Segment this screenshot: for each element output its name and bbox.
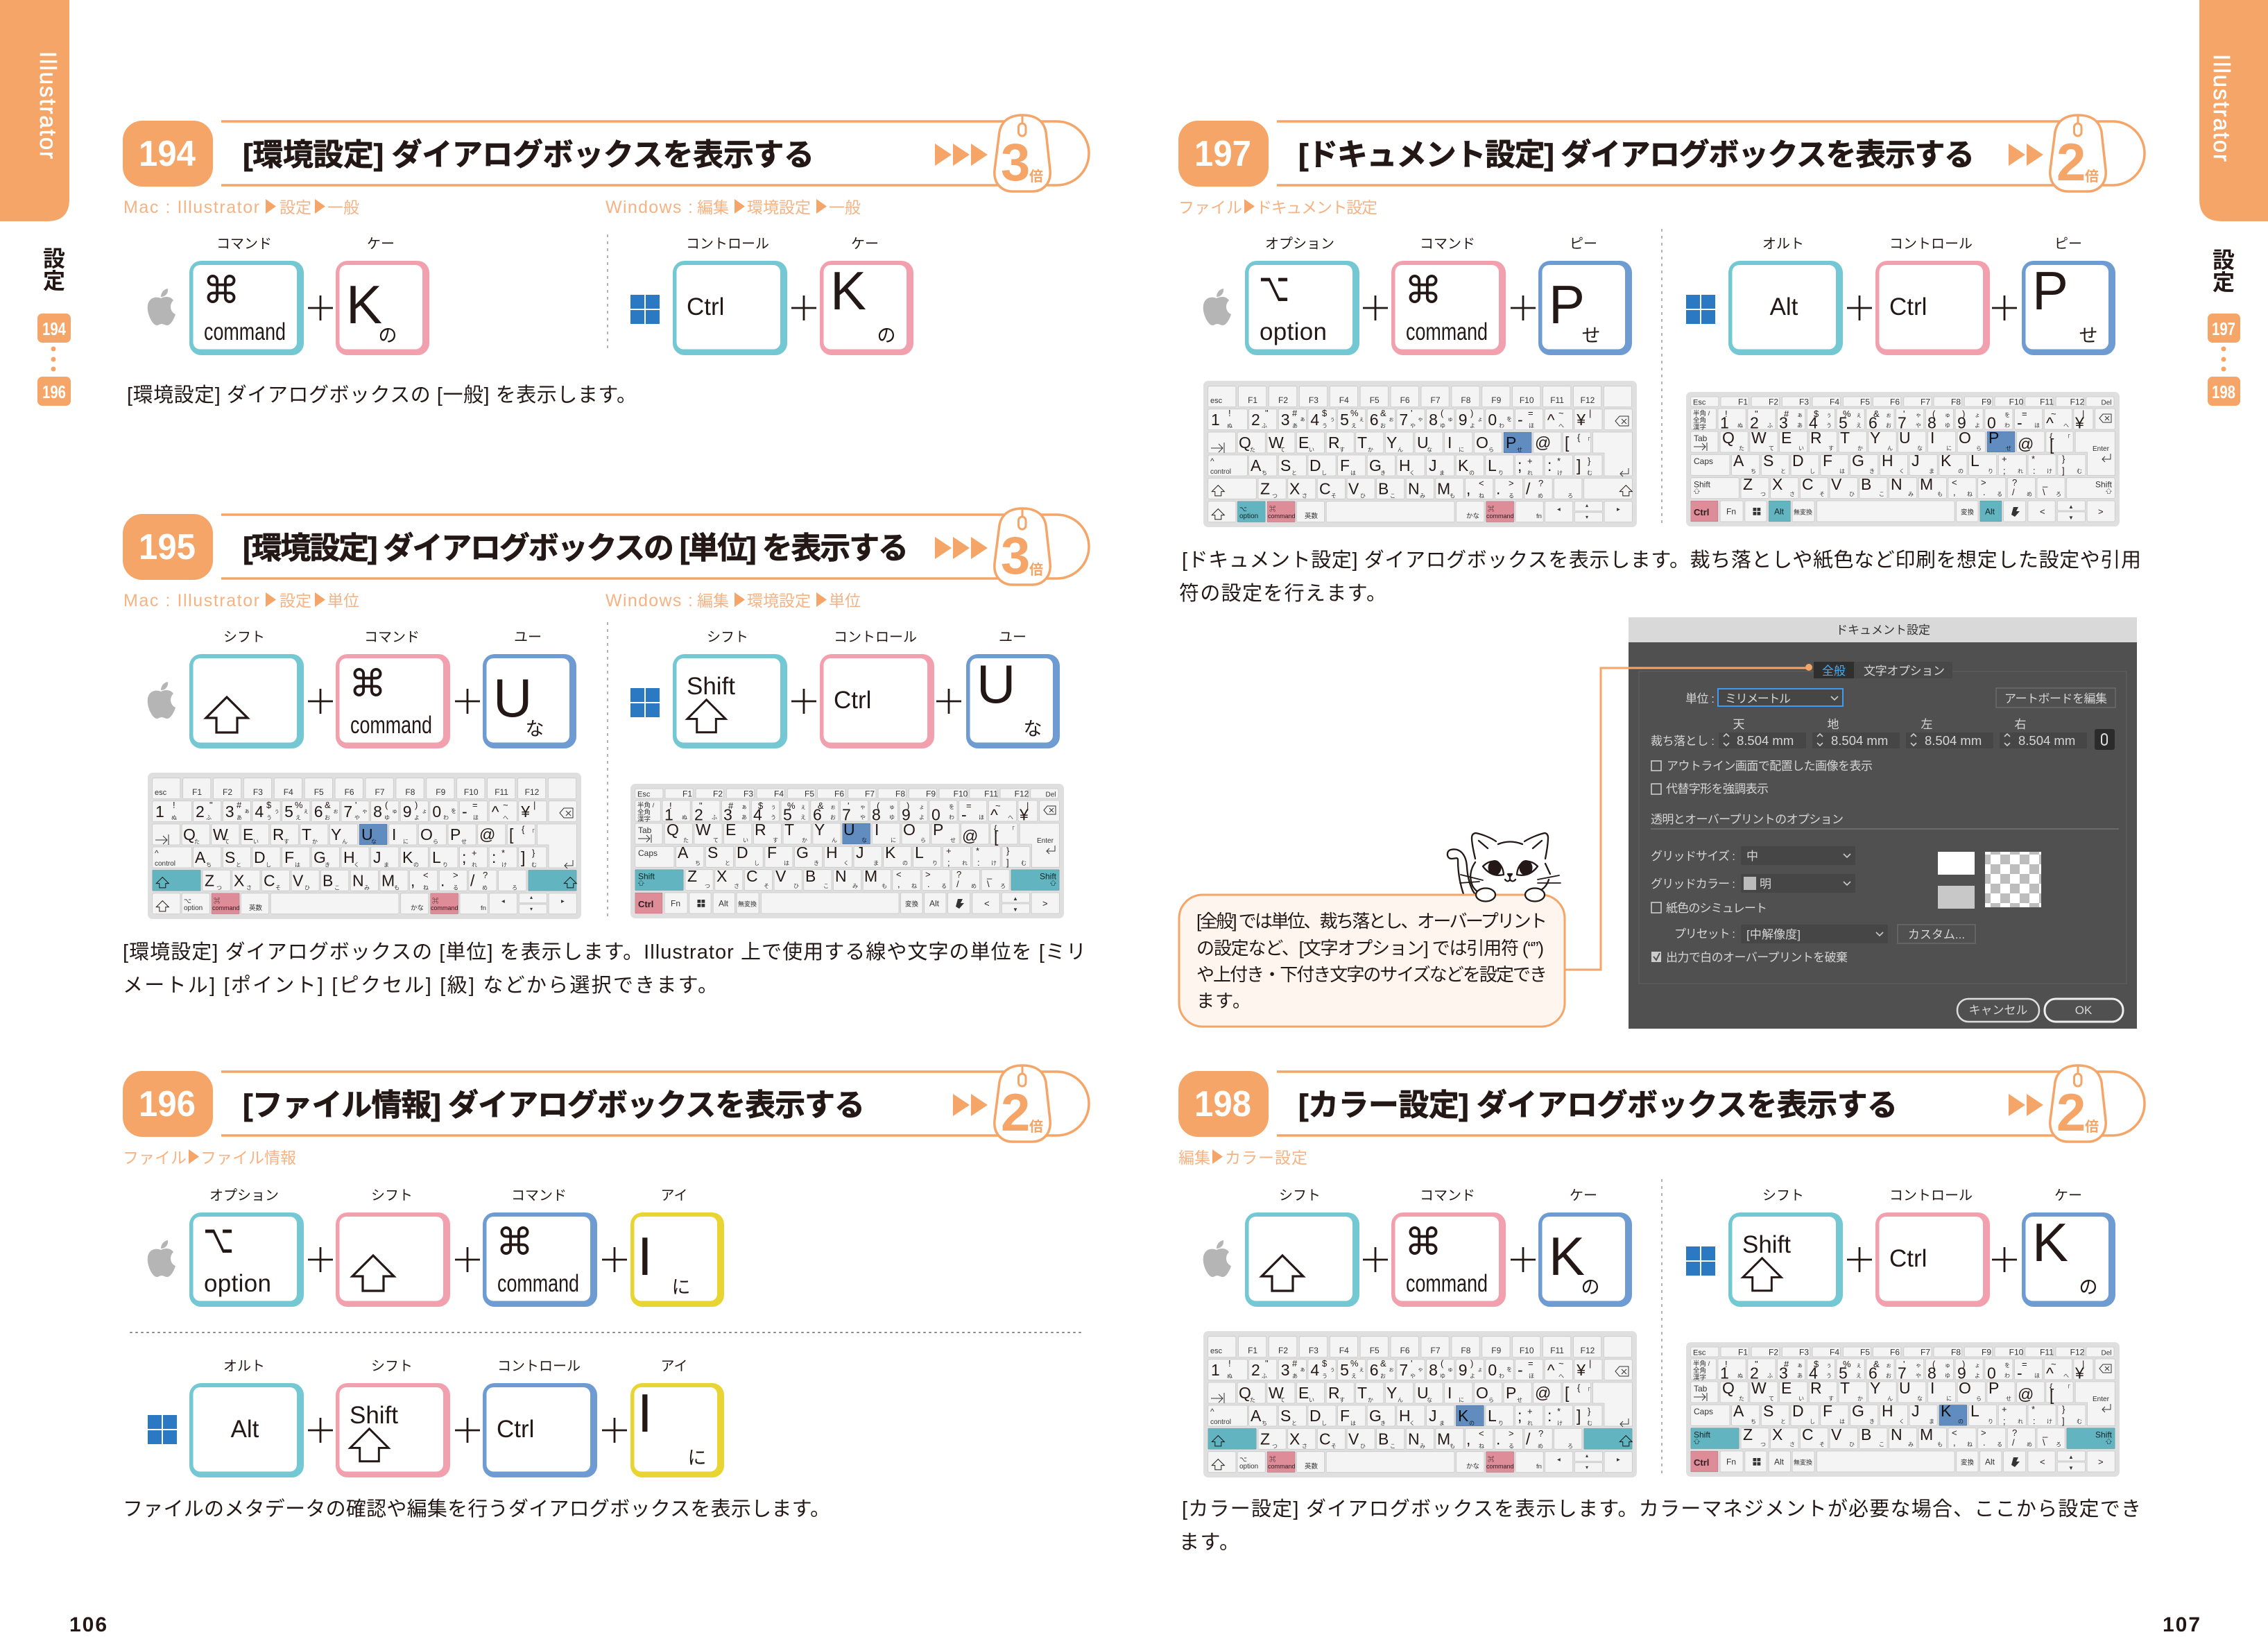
right side heading: 設定 xyxy=(2213,248,2235,295)
key: option: option xyxy=(1260,318,1327,345)
key: I windows: に xyxy=(688,1448,706,1468)
menu path windows: 単位 xyxy=(829,592,861,610)
key: Alt: Alt xyxy=(1770,293,1798,320)
heading 194 xyxy=(123,121,1089,187)
heading 198: [カラー設定] ダイアログボックスを表示する xyxy=(1298,1088,1898,1122)
key: U windows xyxy=(966,630,1060,748)
key: command xyxy=(1391,1188,1506,1307)
key: shift: シフト xyxy=(1279,1188,1321,1203)
plus xyxy=(1847,1247,1872,1272)
screenshot: document settings dialog: ミリメートル xyxy=(1725,692,1791,705)
left side range chips 194-196 xyxy=(37,314,71,406)
screenshot: document settings dialog: 中 xyxy=(1746,850,1758,863)
key: K windows: の xyxy=(2079,1277,2097,1298)
key: Ctrl: コントロール xyxy=(1889,1188,1973,1203)
speed badge 2x xyxy=(2009,1065,2106,1142)
key: P mac: せ xyxy=(1581,325,1601,346)
screenshot: document settings dialog: 紙色のシミュレート xyxy=(1666,902,1767,915)
screenshot: document settings dialog: 明 xyxy=(1760,877,1771,891)
left side tab: Illustrator xyxy=(35,51,61,159)
menu path mac: Mac : Illustrator xyxy=(123,198,259,217)
illustration: cat xyxy=(1447,833,1561,894)
key: P windows: P xyxy=(2032,260,2068,321)
key: option: option xyxy=(204,1270,271,1297)
plus xyxy=(308,295,333,320)
divider xyxy=(607,622,608,919)
page number 106: 106 xyxy=(69,1613,107,1636)
screenshot: document settings dialog xyxy=(1629,617,2137,1029)
callout: tab explanation: や上付き・下付き文字のサイズなどを設定でき xyxy=(1196,964,1547,985)
divider xyxy=(607,234,608,350)
speed badge 2x: 2 xyxy=(2056,1083,2086,1142)
key: Ctrl: コントロール xyxy=(686,237,769,252)
menu path windows xyxy=(605,198,861,217)
plus xyxy=(1363,295,1388,320)
key: U mac: ユー xyxy=(514,630,542,645)
key: K mac: K xyxy=(1549,1226,1585,1287)
description 195: メートル] [ポイント] [ピクセル] [級] などから選択できます。 xyxy=(123,974,718,997)
screenshot: document settings dialog: ドキュメント設定 xyxy=(1836,624,1930,637)
speed badge 3x xyxy=(935,508,1050,585)
left side range chips 194-196: 196 xyxy=(42,382,66,402)
screenshot: document settings dialog: 右 xyxy=(2014,718,2027,731)
key: U mac xyxy=(483,630,576,748)
description 197: 符の設定を行えます。 xyxy=(1179,582,1386,605)
screenshot: document settings dialog: 8.504 mm xyxy=(2018,733,2075,748)
icon: apple xyxy=(1203,1240,1231,1277)
key: Shift: Shift xyxy=(350,1402,398,1429)
plus xyxy=(308,1418,333,1443)
screenshot: document settings dialog: 単位 : xyxy=(1685,692,1715,705)
key: option xyxy=(1245,237,1359,355)
key: command: ⌘ xyxy=(1404,1220,1442,1264)
icon: windows xyxy=(630,295,660,324)
key: Ctrl: コントロール xyxy=(1889,237,1973,252)
key: option: オプション xyxy=(1265,237,1334,252)
plus xyxy=(602,1418,627,1443)
right side range chips 197-198: 198 xyxy=(2212,382,2235,402)
key: Ctrl: コントロール xyxy=(497,1359,581,1374)
menu path: ドキュメント設定 xyxy=(1256,198,1377,216)
left side heading: 設定: 設 xyxy=(43,246,65,271)
key: Shift: シフト xyxy=(707,630,748,645)
key: I windows: I xyxy=(637,1382,653,1443)
speed badge 3x: 3 xyxy=(1001,133,1030,192)
speed badge 3x: 3 xyxy=(1001,526,1030,585)
key: P windows: ピー xyxy=(2054,237,2082,252)
key: Alt xyxy=(1728,237,1843,355)
divider xyxy=(1661,229,1663,526)
key: K mac: ケー xyxy=(367,237,395,252)
key: K mac xyxy=(1538,1188,1632,1307)
key: P mac xyxy=(1538,237,1632,355)
key: K windows: ケー xyxy=(851,237,879,252)
divider xyxy=(1661,1179,1663,1477)
key: command: コマンド xyxy=(216,237,272,252)
heading 195 xyxy=(123,514,1089,580)
key: K windows: ケー xyxy=(2054,1188,2082,1203)
key: Shift: Shift xyxy=(687,673,735,700)
speed badge 2x: 倍 xyxy=(2085,1119,2099,1135)
heading 196: 196 xyxy=(139,1084,196,1124)
illustration: cat paws xyxy=(1476,888,1545,902)
right side heading: 設定: 設 xyxy=(2213,248,2235,273)
key: U mac: U xyxy=(493,667,532,728)
plus xyxy=(455,689,480,714)
key: option: ⌥ xyxy=(1259,264,1289,311)
key: command: ⌘ xyxy=(1404,268,1442,312)
left side tab xyxy=(0,0,69,221)
key: Alt: オルト xyxy=(223,1359,265,1374)
key: command: command xyxy=(497,1270,579,1297)
page number 107: 107 xyxy=(2163,1613,2200,1636)
key: I mac: に xyxy=(671,1277,691,1298)
menu path xyxy=(1178,1149,1307,1167)
speed badge 2x xyxy=(2009,115,2106,192)
icon: apple xyxy=(148,1240,175,1277)
menu path: 編集 xyxy=(1178,1149,1210,1167)
plus xyxy=(1511,1247,1536,1272)
key: command: コマンド xyxy=(364,630,420,645)
key: U windows: な xyxy=(1024,719,1042,739)
left side heading: 設定 xyxy=(43,246,65,293)
key: Shift: シフト xyxy=(1762,1188,1804,1203)
speed badge 2x: 2 xyxy=(2056,133,2086,192)
icon: apple xyxy=(148,682,175,719)
key: U windows: U xyxy=(977,653,1015,714)
screenshot: document settings dialog: グリッドカラー : xyxy=(1651,877,1735,891)
key: command: コマンド xyxy=(1420,237,1475,252)
key: command: ⌘ xyxy=(496,1220,533,1264)
key: shift: シフト xyxy=(223,630,265,645)
key: K mac: ケー xyxy=(1570,1188,1597,1203)
key: Shift xyxy=(673,630,787,748)
screenshot: document settings dialog: 8.504 mm xyxy=(1737,733,1794,748)
key: K mac: K xyxy=(346,274,382,335)
key: Ctrl: Ctrl xyxy=(1889,293,1927,320)
description 198: ます。 xyxy=(1179,1532,1239,1554)
icon: windows xyxy=(1686,295,1715,324)
plus xyxy=(1992,1247,2017,1272)
key: Ctrl: Ctrl xyxy=(834,687,871,714)
key: I windows xyxy=(630,1359,724,1477)
key: Alt: Alt xyxy=(231,1416,259,1443)
panel: section 194 xyxy=(123,115,1089,406)
key: option: オプション xyxy=(209,1188,279,1203)
right side range chips 197-198: 197 xyxy=(2212,318,2235,339)
speed badge 2x: 倍 xyxy=(1029,1119,1043,1135)
screenshot: document settings dialog: 8.504 mm xyxy=(1925,733,1982,748)
key: Ctrl xyxy=(673,237,787,355)
key: P windows xyxy=(2022,237,2115,355)
heading 197 xyxy=(1178,121,2145,187)
menu path: ファイル xyxy=(123,1149,187,1167)
menu path windows: 編集 xyxy=(697,198,729,216)
key: command xyxy=(1391,237,1506,355)
key: command: ⌘ xyxy=(349,662,386,705)
plus xyxy=(602,1247,627,1272)
menu path xyxy=(1178,198,1377,216)
plus xyxy=(1511,295,1536,320)
left side heading: 設定: 定 xyxy=(43,268,65,293)
right side heading: 設定: 定 xyxy=(2213,270,2235,295)
menu path mac: Mac : Illustrator xyxy=(123,591,259,610)
key: Ctrl xyxy=(1875,1188,1990,1307)
key: Ctrl xyxy=(1875,237,1990,355)
key: command: ⌘ xyxy=(203,268,240,312)
menu path windows xyxy=(605,591,861,610)
screenshot: document settings dialog: 地 xyxy=(1827,718,1839,731)
speed badge 2x: 倍 xyxy=(2085,169,2099,185)
description 197: [ドキュメント設定] ダイアログボックスを表示します。裁ち落としや紙色など印刷を想定した設定や引用 xyxy=(1182,549,2141,572)
keyboard mac xyxy=(1203,381,1637,527)
key: K windows xyxy=(2022,1188,2115,1307)
screenshot: document settings dialog: キャンセル xyxy=(1968,1004,2028,1017)
screenshot: document settings dialog: プリセット : xyxy=(1674,927,1735,941)
menu path mac: 設定 xyxy=(280,592,311,610)
key: I windows: アイ xyxy=(660,1359,688,1374)
callout: tab explanation: ます。 xyxy=(1196,991,1251,1011)
plus xyxy=(1363,1247,1388,1272)
panel: section 196 xyxy=(123,1065,1089,1520)
key: K windows: K xyxy=(2032,1212,2068,1273)
callout: tab explanation: [全般] では単位、裁ち落とし、オーバープリント xyxy=(1196,911,1547,932)
screenshot: document settings dialog: 裁ち落とし : xyxy=(1651,735,1715,748)
right side range chips 197-198 xyxy=(2208,314,2240,406)
description 195: [環境設定] ダイアログボックスの [単位] を表示します。Illustrator 上で使用する線や文字の単位を [ミリ xyxy=(123,941,1086,963)
menu path windows: 環境設定 xyxy=(747,198,811,216)
key: Ctrl: Ctrl xyxy=(1889,1245,1927,1272)
screenshot: document settings dialog: カスタム... xyxy=(1908,928,1965,941)
speed badge 2x: 2 xyxy=(1001,1083,1030,1142)
screenshot: document settings dialog: 透明とオーバープリントのオプション xyxy=(1651,813,1844,826)
key: K mac xyxy=(336,237,429,355)
menu path mac: 設定 xyxy=(280,198,311,216)
key: option xyxy=(189,1188,304,1307)
key: I mac: アイ xyxy=(660,1188,688,1203)
key: shift xyxy=(336,1188,450,1307)
keyboard windows xyxy=(630,784,1064,918)
panel: section 197 xyxy=(1178,115,2145,1029)
heading 194: [環境設定] ダイアログボックスを表示する xyxy=(243,138,814,172)
key: U mac: な xyxy=(526,719,544,739)
speed badge 3x xyxy=(935,115,1050,192)
key: shift xyxy=(1245,1188,1359,1307)
icon: windows xyxy=(630,688,660,717)
key: P mac: ピー xyxy=(1570,237,1597,252)
plus xyxy=(1847,295,1872,320)
icon: windows xyxy=(148,1415,177,1444)
key: P windows: せ xyxy=(2079,325,2097,346)
key: Ctrl xyxy=(483,1359,597,1477)
menu path windows: 一般 xyxy=(829,198,861,216)
key: K mac: の xyxy=(1581,1277,1599,1298)
key: K windows: K xyxy=(830,260,866,321)
description 198 xyxy=(1179,1498,2141,1554)
heading 195: [環境設定] ダイアログボックスの [単位] を表示する xyxy=(243,531,909,565)
plus xyxy=(308,689,333,714)
callout: tab explanation: の設定など、[文字オプション] では引用符 (“”) xyxy=(1196,938,1544,959)
menu path mac xyxy=(123,591,359,610)
key: U windows: ユー xyxy=(999,630,1026,645)
key: Shift: シフト xyxy=(371,1359,413,1374)
icon: windows xyxy=(1686,1246,1715,1276)
description 197 xyxy=(1179,549,2141,605)
screenshot: document settings dialog: アウトライン画面で配置した画像を表示 xyxy=(1667,760,1873,773)
panel: section 198 xyxy=(1178,1065,2145,1554)
key: command: コマンド xyxy=(1420,1188,1475,1203)
menu path xyxy=(123,1149,296,1167)
key: P mac: P xyxy=(1549,274,1585,335)
callout: tab explanation xyxy=(1179,664,1812,1027)
key: command: command xyxy=(204,318,286,345)
plus xyxy=(455,1247,480,1272)
description 198: [カラー設定] ダイアログボックスを表示します。カラーマネジメントが必要な場合、ここから設定でき xyxy=(1182,1498,2141,1520)
key: command: コマンド xyxy=(511,1188,567,1203)
icon: apple xyxy=(1203,289,1231,325)
key: Ctrl: コントロール xyxy=(834,630,917,645)
right side tab: Illustrator xyxy=(2209,54,2235,162)
right side tab xyxy=(2199,0,2268,221)
heading 194: 194 xyxy=(139,134,196,174)
key: Ctrl xyxy=(820,630,934,748)
key: K mac: の xyxy=(379,325,397,346)
menu path windows: Windows : xyxy=(605,591,693,610)
key: I mac xyxy=(630,1188,724,1307)
panel: section 195 xyxy=(123,508,1089,997)
screenshot: document settings dialog: 代替字形を強調表示 xyxy=(1666,782,1769,796)
plus xyxy=(1992,295,2017,320)
menu path: カラー設定 xyxy=(1225,1149,1307,1167)
speed badge 3x: 倍 xyxy=(1029,169,1043,185)
plus xyxy=(791,295,816,320)
key: shift xyxy=(189,630,304,748)
key: command: command xyxy=(350,712,432,739)
key: Ctrl: Ctrl xyxy=(497,1416,534,1443)
key: command xyxy=(483,1188,597,1307)
description 195 xyxy=(123,941,1086,997)
speed badge 2x xyxy=(953,1065,1050,1142)
menu path: ファイル xyxy=(1178,198,1242,216)
plus xyxy=(791,689,816,714)
key: command xyxy=(189,237,304,355)
left side range chips 194-196: 194 xyxy=(42,318,66,339)
icon: apple xyxy=(148,289,175,325)
plus xyxy=(308,1247,333,1272)
screenshot: document settings dialog: 全般 xyxy=(1822,665,1846,678)
menu path windows: 編集 xyxy=(697,592,729,610)
menu path mac: 単位 xyxy=(327,592,359,610)
key: command xyxy=(336,630,450,748)
screenshot: document settings dialog: OK xyxy=(2075,1004,2093,1017)
key: command: command xyxy=(1406,1270,1488,1297)
screenshot: document settings dialog: 左 xyxy=(1921,718,1932,731)
key: Alt xyxy=(189,1359,304,1477)
key: Ctrl: Ctrl xyxy=(687,293,724,320)
heading 196: [ファイル情報] ダイアログボックスを表示する xyxy=(243,1088,865,1122)
key: Shift: Shift xyxy=(1742,1231,1791,1258)
heading 196 xyxy=(123,1071,1089,1137)
keyboard windows xyxy=(1686,392,2120,526)
menu path windows: 環境設定 xyxy=(747,592,811,610)
key: command: command xyxy=(1406,318,1488,345)
speed badge 3x: 倍 xyxy=(1029,562,1043,578)
screenshot: document settings dialog: 天 xyxy=(1733,718,1745,731)
menu path mac: 一般 xyxy=(327,198,359,216)
plus xyxy=(936,689,961,714)
key: K windows xyxy=(820,237,913,355)
menu path: ファイル情報 xyxy=(200,1149,296,1167)
plus xyxy=(455,1418,480,1443)
screenshot: document settings dialog: グリッドサイズ : xyxy=(1651,850,1735,863)
heading 198 xyxy=(1178,1071,2145,1137)
heading 198: 198 xyxy=(1194,1084,1251,1124)
heading 197: 197 xyxy=(1194,134,1251,174)
screenshot: document settings dialog: アートボードを編集 xyxy=(2004,692,2107,705)
keyboard mac xyxy=(148,773,581,919)
description 196: ファイルのメタデータの確認や編集を行うダイアログボックスを表示します。 xyxy=(123,1498,830,1520)
key: I mac: I xyxy=(637,1226,653,1287)
screenshot: document settings dialog: 出力で白のオーバープリントを破棄 xyxy=(1666,951,1848,964)
screenshot: document settings dialog: 文字オプション xyxy=(1864,665,1945,678)
key: option: ⌥ xyxy=(203,1215,234,1262)
keyboard windows xyxy=(1686,1342,2120,1477)
key: Alt: オルト xyxy=(1762,237,1804,252)
keyboard mac xyxy=(1203,1331,1637,1477)
heading 197: [ドキュメント設定] ダイアログボックスを表示する xyxy=(1298,138,1975,172)
screenshot: document settings dialog: [中解像度] xyxy=(1746,928,1801,941)
screenshot: document settings dialog: 8.504 mm xyxy=(1831,733,1888,748)
menu path mac xyxy=(123,198,359,217)
dotted separator xyxy=(130,1332,1082,1333)
key: Shift xyxy=(1728,1188,1843,1307)
menu path windows: Windows : xyxy=(605,198,693,217)
key: Shift xyxy=(336,1359,450,1477)
key: K windows: の xyxy=(877,325,896,346)
heading 195: 195 xyxy=(139,527,196,567)
key: shift: シフト xyxy=(371,1188,413,1203)
description 194: [環境設定] ダイアログボックスの [一般] を表示します。 xyxy=(127,384,637,406)
